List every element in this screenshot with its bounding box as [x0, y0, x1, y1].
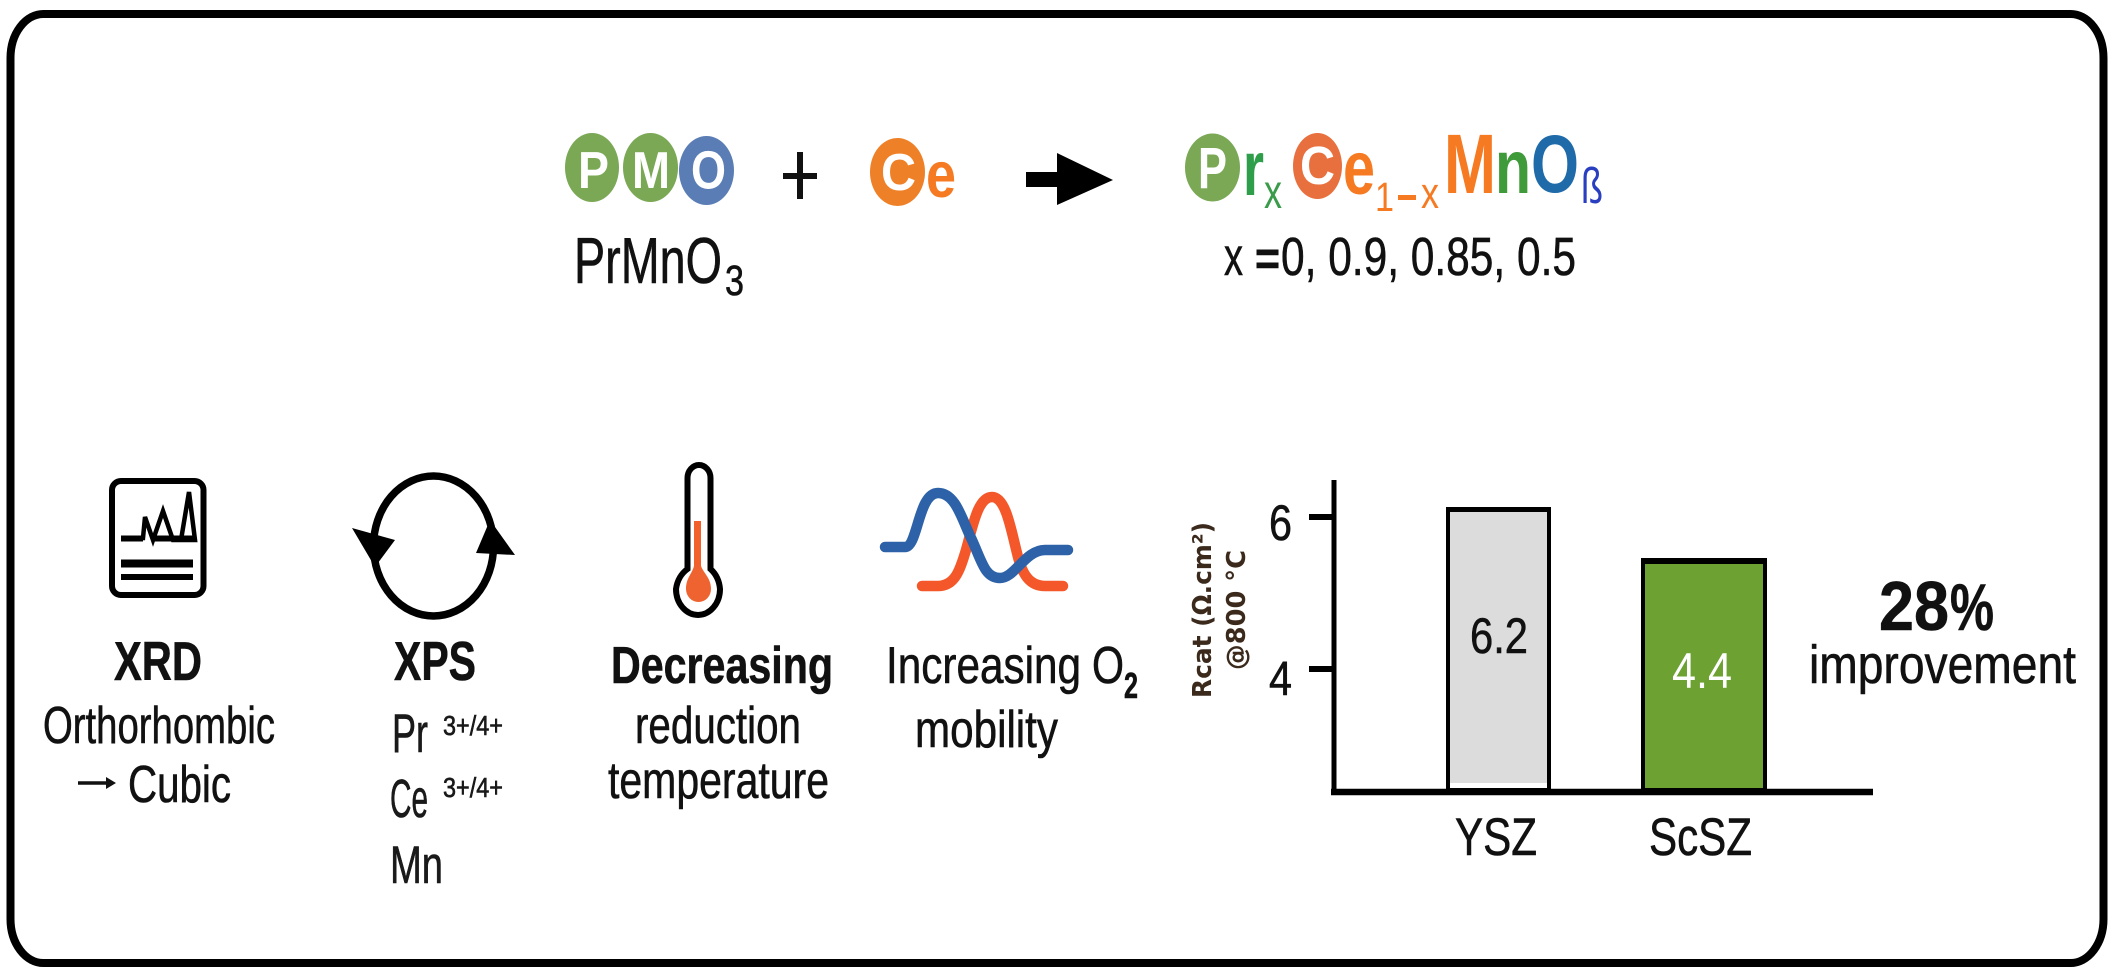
x-axis labels: ScSZ	[1649, 808, 1752, 867]
formula: PrxCe1-xMnOβ: x	[1264, 166, 1282, 219]
icon: thermometer	[676, 465, 720, 615]
icon: overlapping curves	[885, 493, 1068, 586]
bar: YSZ: 6.2	[1470, 608, 1528, 664]
label: PrMnO3: PrMnO	[574, 224, 722, 297]
label: x values: x	[1224, 227, 1243, 287]
text: Orthorhombic to Cubic	[43, 697, 275, 814]
column: XPS	[352, 476, 515, 895]
icon: Ce circle: C	[881, 144, 916, 202]
callout: 28% improvement: improvement	[1809, 635, 2076, 695]
y-axis ticks and labels: 6	[1269, 495, 1292, 551]
formula: PrxCe1-xMnOβ	[1185, 117, 1603, 220]
y-axis title: Rcat (Ω.cm²)	[1188, 522, 1218, 698]
formula: PrxCe1-xMnOβ: C	[1300, 136, 1335, 196]
arrow	[1026, 153, 1113, 205]
y-axis title: @800 °C	[1222, 550, 1252, 670]
text: Increasing O2 mobility: O	[1092, 637, 1124, 695]
text: Orthorhombic to Cubic: Cubic	[128, 756, 231, 814]
formula: PrxCe1-xMnOβ: e	[1343, 126, 1375, 211]
equation: PMO plus Ce gives doped perovskite	[565, 117, 1603, 305]
bar: ScSZ: 4.4	[1672, 643, 1732, 699]
heading: XRD: XRD	[114, 630, 202, 692]
column: XRD	[43, 481, 275, 814]
bar chart: Rcat by electrolyte	[1188, 480, 1873, 867]
y-axis ticks and labels: 4	[1269, 653, 1292, 706]
bar: ScSZ	[1641, 558, 1767, 790]
formula: PrxCe1-xMnOβ: P	[1198, 136, 1227, 201]
icon: PMO circles: P	[578, 142, 609, 200]
x-axis labels: YSZ	[1455, 808, 1537, 867]
text: reduction temperature	[608, 697, 829, 810]
heading: XPS: XPS	[394, 630, 476, 692]
formula: PrxCe1-xMnOβ: n	[1495, 125, 1531, 210]
label: x values: 0, 0.9, 0.85, 0.5	[1281, 227, 1576, 287]
text: Increasing O2 mobility: mobility	[915, 701, 1058, 759]
icon: Ce circle	[870, 138, 956, 211]
icon: PMO circles: O	[691, 140, 726, 200]
text: oxidation states: Mn	[390, 836, 443, 895]
icon: redox cycle arrows	[352, 476, 515, 616]
formula: PrxCe1-xMnOβ: 1	[1375, 174, 1394, 220]
text: oxidation states: Pr	[392, 702, 428, 764]
y-axis title	[1188, 522, 1252, 698]
axes	[1331, 480, 1873, 793]
column: oxygen mobility	[885, 493, 1138, 759]
text: Orthorhombic to Cubic: Orthorhombic	[43, 697, 275, 755]
text: reduction temperature: temperature	[608, 752, 829, 810]
callout: 28% improvement: %	[1950, 570, 1994, 644]
text: reduction temperature: reduction	[635, 697, 801, 755]
formula: PrxCe1-xMnOβ: r	[1243, 124, 1264, 212]
text: oxidation states	[390, 702, 503, 895]
icon: XRD pattern	[112, 481, 204, 595]
x-axis labels	[1455, 808, 1752, 867]
bar: YSZ	[1446, 507, 1551, 790]
callout: 28% improvement: 28	[1879, 567, 1949, 645]
text: Increasing O2 mobility: Increasing	[886, 637, 1081, 695]
heading: Decreasing: Decreasing	[611, 637, 833, 695]
icon: Ce circle: e	[926, 138, 956, 211]
y-axis ticks and labels	[1269, 495, 1334, 706]
text: oxidation states: Ce	[390, 769, 428, 829]
text: oxidation states: 3+/4+	[443, 772, 503, 803]
text: oxidation states: 3+/4+	[443, 710, 503, 741]
icon: PMO circles: M	[632, 142, 670, 200]
column: reduction temperature	[608, 465, 833, 810]
formula: PrxCe1-xMnOβ: x	[1421, 169, 1439, 218]
label: x values: =	[1255, 233, 1280, 286]
text: Increasing O2 mobility: 2	[1124, 665, 1138, 706]
text: Increasing O2 mobility	[886, 637, 1138, 759]
formula: PrxCe1-xMnOβ: ß	[1581, 158, 1603, 214]
icon: PMO circles	[565, 133, 734, 205]
plus sign	[783, 152, 817, 199]
equation: PMO plus Ce gives doped perovskite: 3	[725, 257, 744, 305]
formula: PrxCe1-xMnOβ: M	[1444, 117, 1496, 211]
callout: 28% improvement	[1809, 567, 2076, 695]
label: x values	[1224, 227, 1576, 287]
formula: PrxCe1-xMnOβ: O	[1531, 119, 1579, 210]
